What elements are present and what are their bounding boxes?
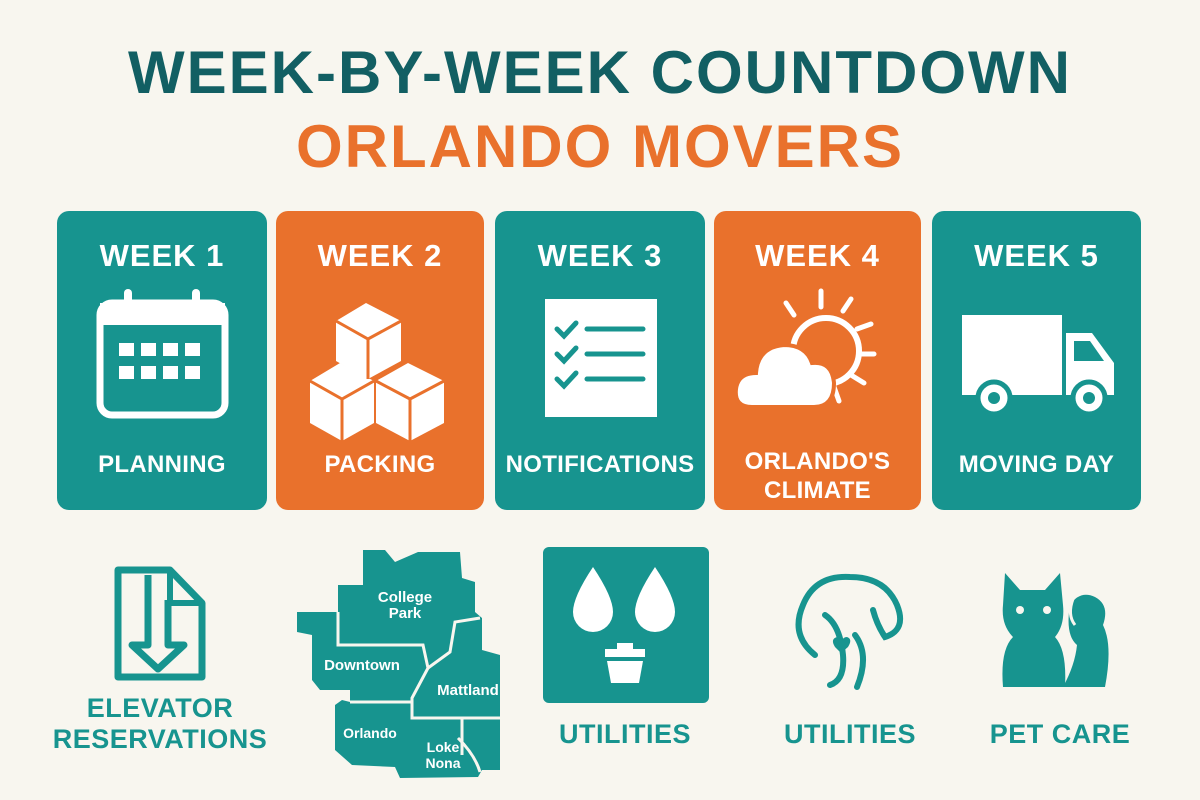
icon: pet care bbox=[1002, 573, 1109, 687]
icon: utilities water bbox=[543, 547, 709, 703]
card: week 3: WEEK 3 bbox=[538, 238, 662, 273]
icon: calendar bbox=[96, 289, 228, 418]
icon: truck bbox=[962, 315, 1114, 412]
label: pet care: PET CARE bbox=[990, 719, 1130, 749]
card: week 4: CLIMATE bbox=[764, 477, 871, 504]
icon: checklist bbox=[545, 299, 657, 417]
map: Orlando neighborhoods bbox=[297, 550, 500, 778]
label: utilities 1: UTILITIES bbox=[559, 719, 691, 749]
map: Orlando neighborhoods: Downtown bbox=[324, 657, 400, 674]
title line 1: WEEK-BY-WEEK COUNTDOWN bbox=[128, 39, 1072, 106]
map: Orlando neighborhoods: Orlando bbox=[343, 725, 397, 741]
card: week 1: WEEK 1 bbox=[100, 238, 224, 273]
card: week 1: PLANNING bbox=[98, 451, 226, 478]
card: week 5 bbox=[932, 211, 1141, 510]
label: elevator reservations bbox=[53, 693, 267, 754]
map: Orlando neighborhoods: College bbox=[378, 589, 432, 606]
card: week 5: MOVING DAY bbox=[959, 451, 1114, 478]
card: week 1 bbox=[57, 211, 267, 510]
map: Orlando neighborhoods: Loke bbox=[427, 739, 460, 755]
card: week 4 bbox=[714, 211, 921, 510]
map: Orlando neighborhoods: Nona bbox=[426, 755, 461, 771]
icon: elevator document bbox=[114, 566, 206, 680]
card: week 3: NOTIFICATIONS bbox=[506, 451, 694, 478]
card: week 3 bbox=[495, 211, 705, 510]
card: week 2 bbox=[276, 211, 484, 510]
icon: boxes bbox=[310, 303, 444, 440]
card: week 4: ORLANDO'S bbox=[745, 448, 890, 475]
label: elevator reservations: ELEVATOR bbox=[87, 693, 233, 723]
label: elevator reservations: RESERVATIONS bbox=[53, 724, 267, 754]
card: week 2: PACKING bbox=[324, 451, 436, 478]
card: week 5: WEEK 5 bbox=[974, 238, 1099, 273]
icon: sun and cloud bbox=[738, 288, 876, 405]
map: Orlando neighborhoods: Park bbox=[389, 605, 422, 622]
card: week 4: WEEK 4 bbox=[755, 238, 880, 273]
icon: pet outline bbox=[796, 574, 904, 690]
title line 2: ORLANDO MOVERS bbox=[296, 113, 904, 180]
card: week 2: WEEK 2 bbox=[318, 238, 442, 273]
map: Orlando neighborhoods: Mattland bbox=[437, 682, 499, 699]
label: utilities 2: UTILITIES bbox=[784, 719, 916, 749]
